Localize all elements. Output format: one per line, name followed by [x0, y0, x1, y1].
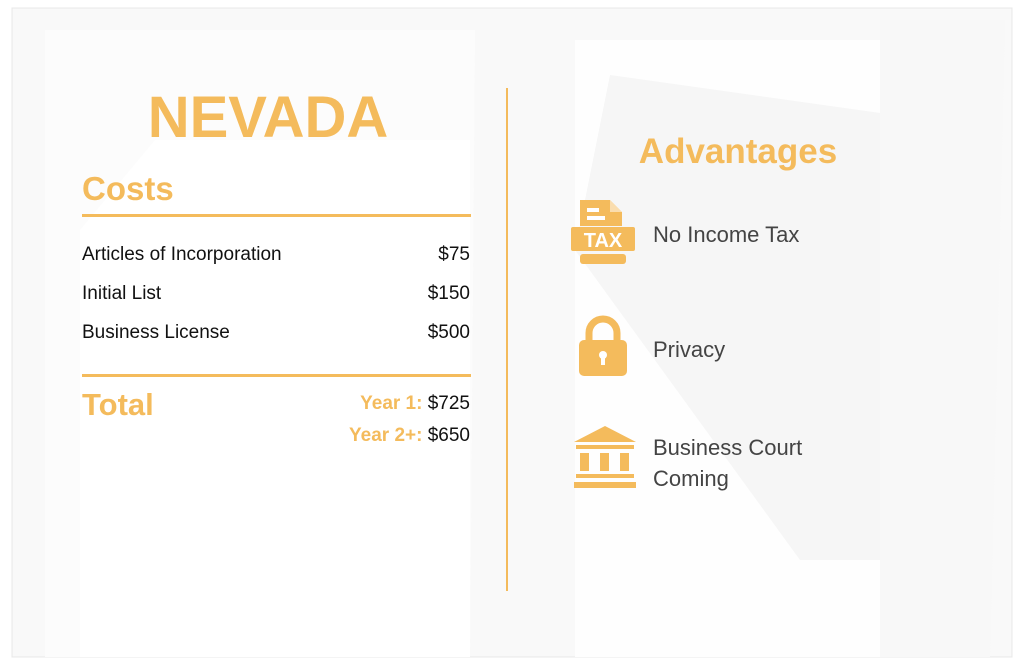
cost rows: Business License: [82, 322, 230, 343]
heading: advantages: Advantages: [639, 132, 837, 171]
icon: tax: TAX: [584, 230, 623, 252]
cost rows: [82, 244, 470, 343]
cost rows: Articles of Incorporation: [82, 244, 282, 265]
text: business court coming: Business Court: [653, 435, 802, 460]
cost rows: $500: [428, 322, 470, 343]
cost rows: $75: [438, 244, 470, 265]
icon: tax: [571, 200, 635, 264]
heading: costs: Costs: [82, 170, 174, 207]
year totals: [349, 393, 470, 446]
total: Total: [82, 387, 154, 422]
text: business court coming: [653, 435, 802, 491]
year totals: Year 1: $725: [360, 393, 470, 414]
icon: lock: [579, 316, 627, 376]
title: NEVADA: [148, 85, 388, 150]
text: privacy: Privacy: [653, 337, 725, 362]
text: business court coming: Coming: [653, 466, 729, 491]
cost rows: $150: [428, 283, 470, 304]
cost rows: Initial List: [82, 283, 161, 304]
icon: courthouse: [574, 426, 636, 488]
year totals: Year 2+: $650: [349, 425, 470, 446]
text: no income tax: No Income Tax: [653, 222, 799, 247]
